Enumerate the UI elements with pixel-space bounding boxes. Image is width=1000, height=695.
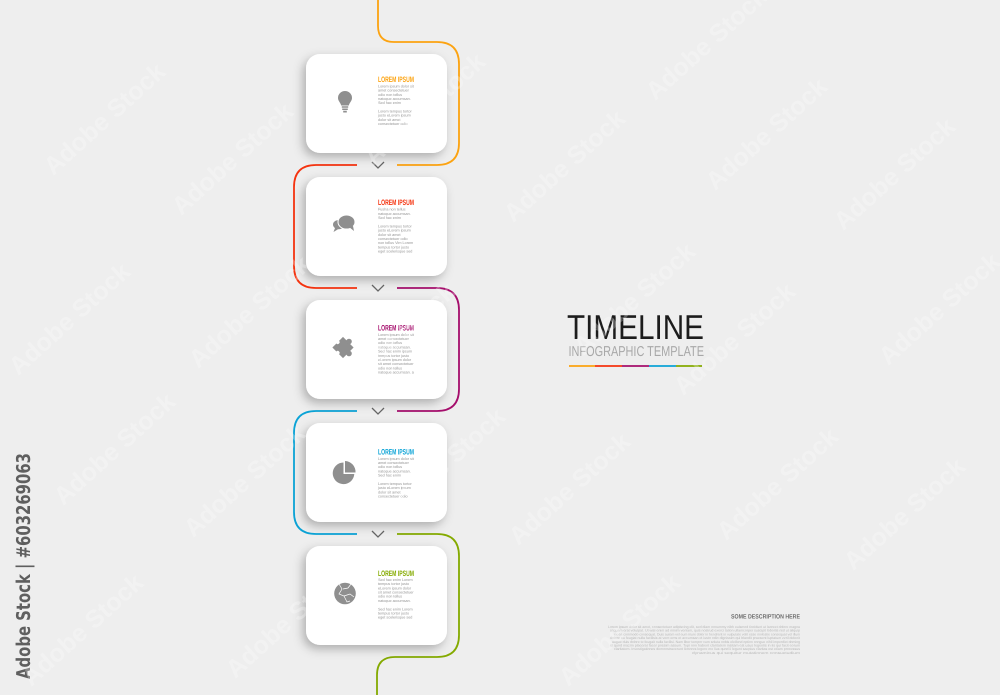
text block: card 2: justo eLorem ipsum (377, 229, 411, 233)
text block: card 3: Lorem ipsum dolor sit (378, 333, 415, 337)
text block: card 2: Lorem tempus tortor (378, 224, 413, 228)
stock id label: Adobe Stock | #603269063 (13, 453, 35, 679)
heading: card 1: LOREM IPSUM (378, 75, 414, 84)
panel: card 3 (306, 300, 447, 399)
text block: card 4: amet consectetuer (378, 461, 410, 465)
description paragraph (608, 625, 800, 655)
text block: card 5: tempus tortor justo (378, 582, 409, 586)
watermarks: Adobe Stock (329, 277, 461, 401)
text block: card 2: natoque accumsan. (378, 212, 411, 216)
watermarks: Adobe Stock (221, 560, 353, 684)
text block: card 1: natoque accumsan. (378, 97, 411, 101)
text block: card 4: odio non tellus (378, 465, 402, 469)
watermarks: Adobe Stock (504, 427, 636, 551)
text block: card 5 (378, 578, 414, 620)
heading: card 2: LOREM IPSUM (378, 198, 414, 207)
text block: card 1 (377, 84, 415, 126)
chevron 1 (372, 162, 384, 168)
text block: card 1: dolor sit amet (378, 118, 401, 122)
text block: card 3: eLorem ipsum dolor (378, 358, 412, 362)
text block: card 1: amet consectetuer (378, 89, 410, 93)
connector: purple (397, 288, 459, 411)
icon: puzzle piece (330, 333, 359, 362)
text block: card 2: dolor sit amet (378, 233, 401, 237)
text block: card 1: odio non tellus (378, 93, 402, 97)
text block: card 1: consectetuer odio (378, 122, 408, 126)
watermarks: Adobe Stock (49, 387, 181, 511)
panel: card 4 (306, 423, 447, 522)
text block: card 3: tempus tortor justo (378, 354, 409, 358)
icon: speech bubbles (333, 215, 355, 232)
text block: card 4 (377, 457, 415, 499)
watermarks: Adobe Stock (569, 237, 701, 361)
multicolour rule (569, 365, 702, 367)
icon: globe (334, 583, 356, 604)
description paragraph: dynamicus qui sequitur mutationem consuetudium (692, 651, 800, 655)
text block: card 5: sit amet consectetuer (378, 590, 414, 594)
text block: card 5: odio non tellus (378, 595, 402, 599)
text block: card 1: Lorem tempus tortor (378, 110, 413, 114)
text block: card 3: natoque accumsan. (378, 345, 411, 349)
watermarks: Adobe Stock (499, 104, 631, 228)
watermarks: Adobe Stock (379, 402, 511, 526)
icon: pie chart (333, 461, 356, 484)
watermarks: Adobe Stock (167, 97, 299, 221)
panel: card 5 (306, 546, 447, 645)
text block: card 5: Sed hac enim Lorem (378, 607, 413, 611)
text block: card 2: Sed hac enim (378, 216, 401, 220)
text block: card 5: tempus tortor justo (378, 612, 409, 616)
connector: blue (294, 411, 357, 534)
watermarks: Adobe Stock (179, 419, 311, 543)
text block: card 2 (377, 208, 413, 254)
description paragraph: aliquam erat volutpat. Ut wisi enim ad minim veniam, quis nostrud exerci tation ullamcorper suscipit lobortis nisl ut aliquip (610, 629, 800, 633)
description paragraph: Lorem ipsum dolor sit amet, consectetuer adipiscing elit, sed diam nonummy nibh euismod tincidunt ut laoreet dolore magna (608, 625, 800, 629)
text block: card 5: eLorem ipsum dolor (378, 586, 412, 590)
description paragraph: augue duis dolore te feugait nulla facilisi. Nam liber tempor cum soluta nobis eleifend option congue nihil imperdiet doming (612, 640, 800, 644)
watermarks: Adobe Stock (39, 57, 171, 181)
heading: card 3: LOREM IPSUM (378, 324, 414, 332)
heading: card 4: LOREM IPSUM (378, 448, 414, 456)
panel: card 1 (306, 54, 447, 153)
text block: card 3: odio non tellus (378, 366, 402, 370)
watermarks: Adobe Stock (839, 452, 971, 576)
text block: card 4: consectetuer odio (378, 495, 408, 499)
text block: card 2: non tellus Vim Lorem (378, 241, 413, 245)
subtitle: INFOGRAPHIC TEMPLATE (568, 344, 704, 360)
watermarks: Adobe Stock (712, 422, 844, 546)
panel: card 2 (306, 177, 447, 276)
description paragraph: id quod mazim placerat facer possim assum. Typi non habent claritatem insitam est usus legentis in iis qui facit eorum (610, 644, 800, 648)
description paragraph: dolore eu feugiat nulla facilisis at vero eros et accumsan et iusto odio dignissim qui blandit praesent luptatum zzril delenit (610, 636, 800, 640)
text block: card 5: Sed hac enim Lorem (378, 578, 413, 582)
text block: card 1: Lorem ipsum dolor sit (378, 84, 415, 88)
title: TIMELINE (567, 309, 704, 347)
text block: card 3 (378, 333, 415, 375)
text block: card 1: justo eLorem ipsum (377, 114, 411, 118)
chevron 2 (372, 285, 384, 291)
text block: card 3: odio non tellus (378, 341, 402, 345)
text block: card 2: tempus tortor justo (378, 245, 409, 249)
text block: card 2: consectetuer odio (378, 237, 408, 241)
text block: card 4: dolor sit amet (378, 490, 401, 494)
watermarks: Adobe Stock (829, 112, 961, 236)
icon: light bulb (338, 91, 352, 112)
text block: card 4: Lorem ipsum dolor sit (378, 457, 415, 461)
text block: card 5: natoque accumsan. (378, 599, 411, 603)
watermarks: Adobe Stock (701, 72, 833, 196)
heading: card 5: LOREM IPSUM (378, 569, 414, 578)
watermarks: Adobe Stock (669, 277, 801, 401)
connector: red (294, 165, 357, 288)
description paragraph: claritatem. Investigationes demonstraverunt lectores legere me lius quod ii legunt saepius claritas est etiam processus (614, 647, 800, 651)
text block: card 3: amet consectetuer (378, 337, 410, 341)
text block: card 4: justo eLorem ipsum (377, 486, 411, 490)
text block: card 2: eget scelerisque sed (378, 250, 412, 254)
text block: card 5: eget scelerisque sed (378, 616, 412, 620)
text block: card 1: Sed hac enim (378, 101, 401, 105)
connector: green (377, 534, 459, 695)
text block: card 2: Fusha non tellus (378, 208, 406, 212)
chevron 4 (372, 531, 384, 537)
text block: card 3: sit amet consectetuer (378, 362, 414, 366)
text block: card 4: Sed hac enim (378, 474, 401, 478)
watermarks: Adobe Stock (359, 47, 491, 171)
watermarks: Adobe Stock (184, 250, 316, 374)
watermarks: Adobe Stock (554, 568, 686, 692)
chevron 3 (372, 408, 384, 414)
text block: card 3: natoque accumsan. a (378, 371, 415, 375)
description paragraph: ex ea commodo consequat. Duis autem vel eum iriure dolor in hendrerit in vulputate velit esse molestie consequat vel illum (614, 632, 800, 636)
connector: orange (378, 0, 459, 165)
watermarks: Adobe Stock (17, 568, 149, 692)
description heading: SOME DESCRIPTION HERE (731, 614, 800, 620)
text block: card 4: natoque accumsan. (378, 469, 411, 473)
watermarks: Adobe Stock (4, 257, 136, 381)
text block: card 3: Sed hac enim ipsum (378, 350, 412, 354)
text block: card 4: Lorem tempus tortor (378, 482, 413, 486)
